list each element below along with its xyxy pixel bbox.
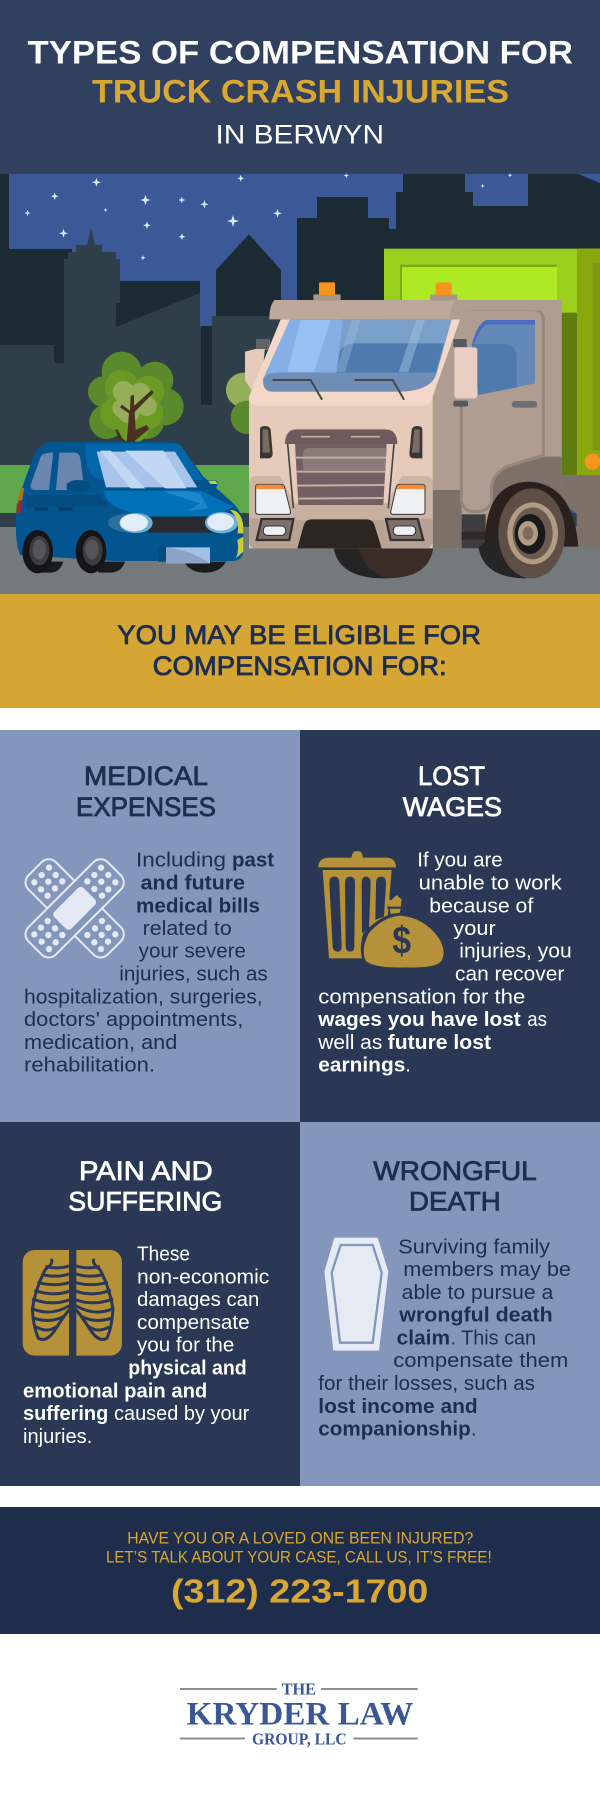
bumper panels — [249, 476, 433, 548]
body text: medical expenses: related to — [143, 918, 232, 940]
body text: lost wages: earnings — [318, 1054, 405, 1076]
body text: lost wages: your — [453, 918, 496, 940]
heading: medical expenses: EXPENSES — [76, 792, 216, 822]
side mirror — [453, 339, 477, 407]
windshield pillar frame — [249, 319, 460, 406]
garbage truck — [245, 249, 600, 578]
logo: The Kryder Law Group, LLC: GROUP, LLC — [252, 1729, 347, 1748]
heading: lost wages: LOST — [418, 761, 485, 791]
body text: wrongful death: for their losses, such as — [318, 1373, 535, 1395]
body text: medical expenses: hospitalization, surgeries, — [24, 986, 263, 1008]
body text: medical expenses: rehabilitation. — [24, 1054, 155, 1076]
body text: lost wages: well as — [317, 1032, 382, 1054]
call to action text — [106, 1529, 492, 1566]
body text: wrongful death: claim — [397, 1327, 450, 1349]
car roof — [85, 443, 203, 480]
logo: The Kryder Law Group, LLC — [180, 1680, 418, 1748]
body text: medical expenses: and future — [141, 872, 245, 894]
body text: lost wages: can recover — [455, 964, 565, 986]
sky with stars — [0, 173, 600, 594]
body text: medical expenses: Including — [136, 850, 226, 872]
body text: pain and suffering: damages can — [137, 1289, 259, 1311]
icon: coffin — [324, 1238, 388, 1351]
title: TYPES OF COMPENSATION FOR — [28, 34, 573, 70]
body text: pain and suffering: you for the — [137, 1335, 234, 1357]
rear wheel — [478, 482, 578, 578]
body text: lost wages: unable to work — [419, 872, 563, 894]
body text: medical expenses: medical bills — [136, 895, 260, 917]
roof visor — [269, 300, 562, 319]
body text: pain and suffering: suffering — [23, 1403, 108, 1425]
body text: wrongful death: wrongful death — [398, 1305, 553, 1327]
car windows — [31, 453, 83, 490]
phone number: (312) 223-1700 — [171, 1573, 428, 1610]
banner heading: COMPENSATION FOR: — [153, 651, 447, 681]
lower cab shadow — [433, 457, 562, 548]
body text: pain and suffering — [23, 1244, 269, 1448]
body text: medical expenses — [24, 850, 274, 1076]
car door side shapes — [26, 495, 108, 507]
panel: pain and suffering — [0, 1122, 300, 1486]
icon: rib cage — [23, 1248, 122, 1357]
car headlights — [108, 510, 243, 558]
body text: pain and suffering: caused by your — [114, 1403, 250, 1425]
car hood — [103, 491, 233, 517]
car body — [16, 442, 243, 561]
car mirror — [67, 480, 217, 491]
body text: pain and suffering: emotional pain and — [23, 1380, 207, 1402]
wipers — [273, 380, 404, 399]
body text: lost wages: future lost — [388, 1032, 491, 1054]
cab side — [433, 300, 562, 548]
body text: pain and suffering: non-economic — [137, 1266, 269, 1288]
illustration: night city scene with car and truck — [0, 173, 600, 594]
body text: medical expenses: past — [232, 850, 274, 872]
fog lights — [257, 519, 423, 540]
front axle wheel — [333, 547, 433, 578]
logo: The Kryder Law Group, LLC: KRYDER LAW — [187, 1696, 413, 1732]
body text: wrongful death: compensate them — [393, 1350, 568, 1372]
body text: wrongful death — [318, 1236, 571, 1441]
panel: lost wages — [300, 730, 600, 1122]
heading: medical expenses — [76, 761, 216, 822]
door outline — [461, 309, 543, 512]
heading: wrongful death: DEATH — [409, 1187, 501, 1217]
headlights — [256, 484, 425, 514]
body text: medical expenses: doctors' appointments, — [24, 1009, 243, 1031]
panel: wrongful death — [300, 1122, 600, 1486]
logo: The Kryder Law Group, LLC: THE — [282, 1680, 316, 1699]
car tail light — [17, 487, 24, 501]
body text: wrongful death: . — [471, 1419, 477, 1441]
body text: lost wages: injuries, you — [459, 941, 572, 963]
body text: pain and suffering: compensate — [137, 1312, 250, 1334]
banner heading — [117, 620, 481, 681]
title: IN BERWYN — [216, 120, 384, 150]
body text: wrongful death: able to pursue a — [402, 1282, 554, 1304]
heading: pain and suffering: PAIN AND — [79, 1156, 213, 1186]
call to action text: HAVE YOU OR A LOVED ONE BEEN INJURED? — [127, 1529, 473, 1547]
body text: pain and suffering: These — [137, 1244, 190, 1266]
icon: trash can and money bag: $ — [392, 919, 411, 963]
heading: medical expenses: MEDICAL — [84, 761, 208, 791]
body text: wrongful death: members may be — [403, 1259, 571, 1281]
car bumper and plate — [158, 547, 210, 563]
rear cab shadow and mirror arm — [245, 347, 265, 403]
heading: lost wages — [403, 761, 502, 822]
blue car — [16, 442, 243, 573]
heading: wrongful death: WRONGFUL — [373, 1156, 537, 1186]
gold banner — [0, 594, 600, 708]
heading: lost wages: WAGES — [403, 792, 502, 822]
body text: medical expenses: injuries, such as — [119, 964, 268, 986]
cab step — [462, 514, 486, 548]
car windshield — [97, 451, 197, 488]
front bumper intake — [297, 519, 382, 548]
title — [28, 34, 573, 150]
body text: medical expenses: medication, and — [24, 1032, 177, 1054]
call to action banner — [0, 1507, 600, 1634]
heading: wrongful death — [373, 1156, 537, 1217]
call to action text: LET’S TALK ABOUT YOUR CASE, CALL US, IT’S FREE! — [106, 1548, 492, 1566]
title: TRUCK CRASH INJURIES — [92, 74, 509, 110]
icon: trash can and money bag — [318, 851, 445, 970]
door handle — [512, 401, 537, 408]
banner heading: YOU MAY BE ELIGIBLE FOR — [117, 620, 481, 650]
grille — [285, 429, 397, 508]
body text: lost wages: If you are — [417, 850, 503, 872]
body text: wrongful death: companionship — [318, 1419, 471, 1441]
windshield — [263, 319, 452, 392]
cab front face — [249, 397, 433, 548]
door window — [472, 320, 535, 395]
grass and road — [0, 465, 600, 594]
marker lights — [260, 426, 422, 458]
heading: pain and suffering — [68, 1156, 222, 1217]
truck container — [384, 249, 600, 548]
car grille — [148, 517, 213, 533]
body text: medical expenses: your severe — [139, 941, 246, 963]
header panel — [0, 0, 600, 174]
car wheels — [22, 530, 106, 573]
body text: wrongful death: lost income and — [318, 1396, 478, 1418]
roof beacons — [313, 282, 457, 300]
icon: crossed bandages — [21, 855, 128, 962]
body text: wrongful death: Surviving family — [398, 1236, 550, 1258]
car far wheels — [40, 562, 226, 573]
body text: wrongful death: . This can — [450, 1327, 536, 1349]
body text: lost wages: compensation for the — [318, 986, 525, 1008]
body text: lost wages: because of — [429, 895, 534, 917]
body text: lost wages: wages you have lost — [317, 1009, 521, 1031]
body text: pain and suffering: physical and — [128, 1358, 247, 1380]
body text: pain and suffering: injuries. — [23, 1426, 92, 1448]
panel: medical expenses — [0, 730, 300, 1122]
body text: lost wages — [317, 850, 572, 1076]
skyline buildings — [0, 174, 600, 527]
body text: lost wages: as — [527, 1009, 547, 1031]
heading: pain and suffering: SUFFERING — [68, 1187, 222, 1217]
body text: lost wages: . — [405, 1054, 411, 1076]
trees — [88, 339, 270, 443]
